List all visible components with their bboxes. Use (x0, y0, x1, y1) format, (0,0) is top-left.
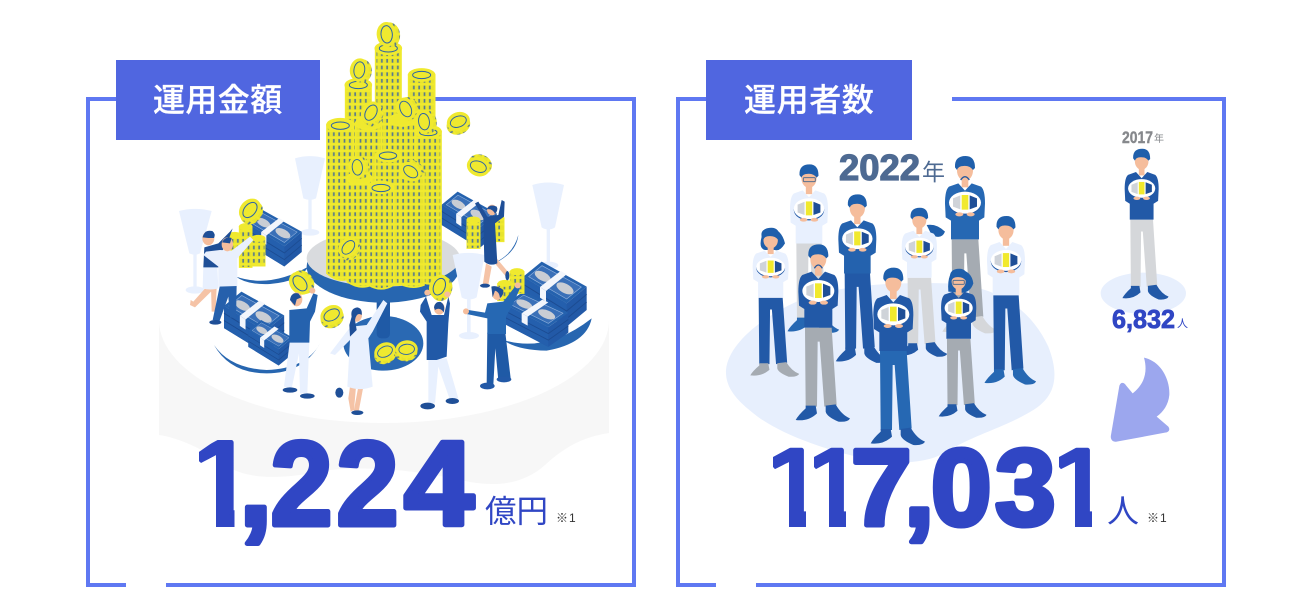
figure: 1,224 amount (199, 438, 576, 546)
figure: 6,832 people: 6,832 (1112, 304, 1175, 334)
tag: investment amount heading: 運用金額 (153, 82, 283, 118)
label: 2022 year: 年 (922, 159, 945, 185)
tag: investor count heading: 運用者数 (744, 82, 874, 118)
person: left woman (750, 228, 799, 377)
background: grey dais with wavy base (159, 217, 609, 484)
background blob (726, 283, 1054, 462)
person: woman in navy top, upper left (190, 228, 233, 312)
icon: side plates (214, 235, 592, 373)
illustration: investors (726, 149, 1186, 462)
arrow (1111, 358, 1169, 442)
person: centre man in blue (836, 194, 887, 363)
person: back man with moustache (942, 156, 997, 333)
figure: 117,031 people: 7 (851, 427, 912, 549)
person: man in white shirt, upper left (203, 237, 253, 325)
figure: 1,224 amount: ※1 (556, 511, 577, 525)
figure: 117,031 people: 3 (995, 427, 1056, 549)
tag: investor count heading (706, 60, 912, 140)
figure: 1,224 amount: 億円 (485, 493, 548, 529)
person: man in blue jacket holding coin (283, 288, 318, 399)
figure: 1,224 amount: , (239, 417, 272, 551)
icon: front glass (453, 253, 485, 339)
icon: loose coins (234, 21, 495, 368)
figure: 1,224 amount: 1 (190, 417, 252, 551)
figure: 117,031 people: 1 (761, 427, 822, 549)
person: woman in white dress (330, 300, 387, 415)
figure: 117,031 people: 1 (1047, 427, 1108, 549)
icon: cash stacks (224, 192, 587, 365)
figure: 1,224 amount: 2 (336, 417, 398, 551)
icon: tall coin stacks (327, 42, 441, 289)
label: 2022 year: 2022 (839, 147, 920, 188)
figure: 1,224 amount: 2 (270, 417, 332, 551)
person: man in blue reaching out (463, 282, 521, 389)
person: man in navy jacket raising coin (420, 290, 459, 409)
person: woman with glasses (939, 269, 987, 418)
figure: 117,031 people: , (904, 427, 934, 549)
icon: central pedestal (307, 230, 460, 371)
2017 ground ellipse (1101, 273, 1186, 314)
person: right man in white (984, 216, 1036, 385)
figure: 117,031 people: ※1 (1147, 511, 1168, 525)
figure: 117,031 people: 人 (1107, 493, 1139, 529)
panel: investment amount frame (88, 99, 634, 585)
illustration: coins, cash and people (179, 21, 592, 415)
figure: 117,031 people: 0 (931, 427, 992, 549)
panel: investor count frame (678, 99, 1224, 585)
icon: champagne glasses in background (179, 156, 564, 294)
label: 2017 year: 年 (1154, 132, 1164, 145)
figure: 1,224 amount: 4 (404, 417, 474, 551)
person: front man with moustache (796, 244, 850, 422)
person: front centre man (871, 268, 925, 445)
icon: small coin stacks (229, 216, 524, 301)
figure: 117,031 people: 1 (801, 427, 862, 549)
person: woman with ponytail (899, 208, 947, 357)
person: 2017 man (1122, 149, 1169, 300)
person: back man with glasses (787, 164, 839, 333)
figure: 6,832 people: 人 (1177, 318, 1188, 330)
tag: investment amount heading (116, 60, 320, 140)
figure: 117,031 people (773, 446, 1166, 544)
person: woman in navy dress, upper right (475, 200, 509, 288)
label: 2017 year: 2017 (1122, 128, 1153, 147)
